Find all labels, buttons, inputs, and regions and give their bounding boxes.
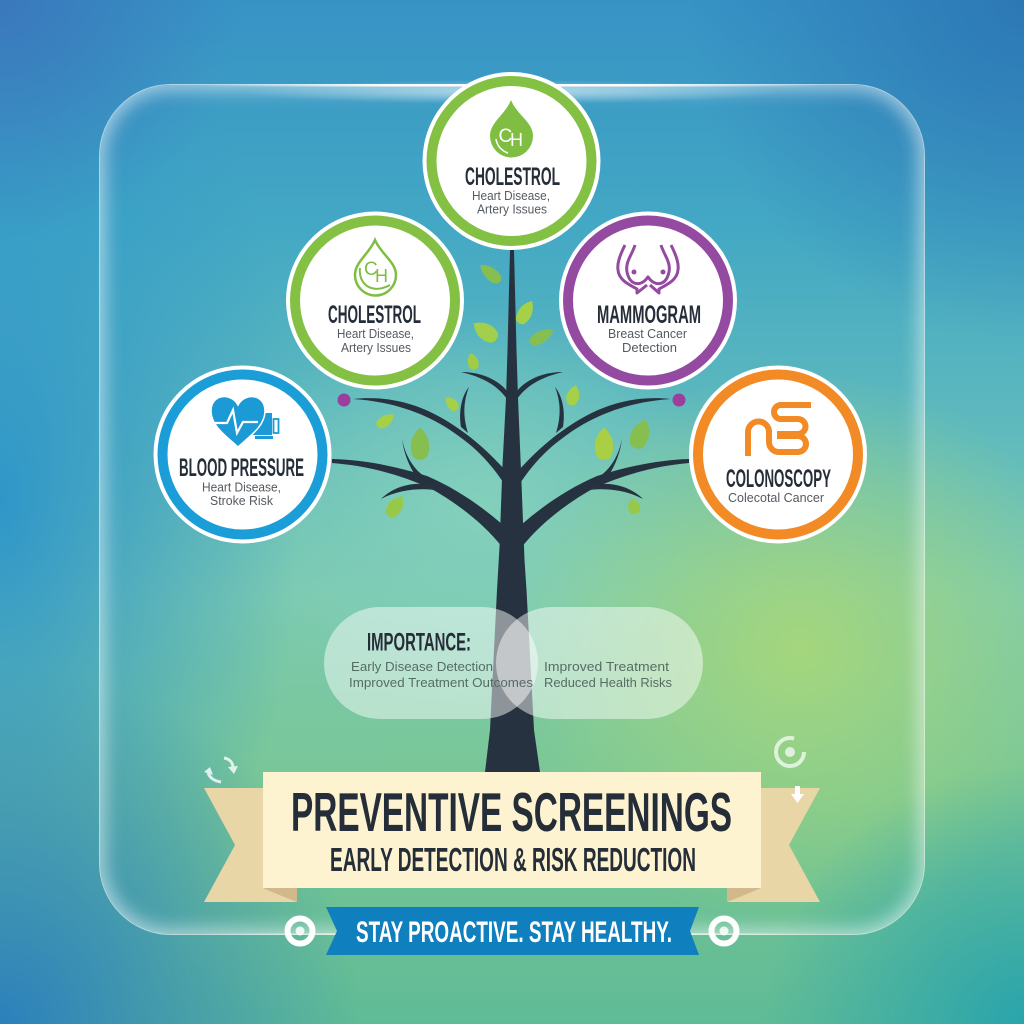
- heading: COLONOSCOPY: [726, 465, 831, 493]
- right benefits: Improved Treatment: [544, 659, 669, 674]
- circle: blood pressure: Stroke Risk: [210, 494, 274, 508]
- left benefits: [349, 659, 534, 690]
- icon: rotate arrows: [204, 758, 238, 782]
- circle: blood pressure: [154, 366, 332, 544]
- icon: outline drop: H: [375, 266, 388, 286]
- purple branch dots: [338, 394, 686, 406]
- tagline banner: [326, 907, 699, 955]
- circle: colonoscopy: [689, 366, 867, 544]
- description: Colecotal Cancer: [728, 491, 824, 505]
- ribbon main: [263, 772, 761, 888]
- right branches: [517, 372, 689, 548]
- heading: CHOLESTROL: [465, 163, 560, 191]
- description: Heart Disease,: [472, 189, 550, 203]
- description: Heart Disease,: [202, 480, 281, 494]
- right benefits: Reduced Health Risks: [544, 675, 672, 690]
- icon: heart and cuff: [211, 397, 278, 447]
- icon: right target ring: [712, 918, 736, 944]
- ribbon right tail: [727, 788, 820, 902]
- icon: filled drop: [490, 100, 533, 158]
- right pill: [496, 607, 703, 719]
- importance heading: IMPORTANCE:: [367, 628, 471, 656]
- icon: colon: [748, 405, 811, 456]
- heading: MAMMOGRAM: [597, 301, 701, 329]
- glass panel: [99, 84, 925, 935]
- icon: top right ring: [776, 738, 804, 766]
- left branches: [332, 372, 507, 548]
- panel highlights: [200, 80, 824, 935]
- description: Heart Disease,: [337, 327, 414, 341]
- left benefits: Early Disease Detection: [351, 659, 493, 674]
- heading: CHOLESTROL: [328, 301, 421, 329]
- circle: mammogram: [559, 212, 737, 390]
- circle: cholesterol top: Artery Issues: [477, 202, 547, 216]
- tree trunk: [485, 250, 540, 772]
- ribbon folds: [263, 888, 761, 902]
- icon: down arrow: [791, 786, 804, 803]
- description: Breast Cancer: [608, 327, 687, 341]
- icon: left target ring: [288, 918, 312, 944]
- left benefits: Improved Treatment Outcomes: [349, 675, 534, 690]
- main title: PREVENTIVE SCREENINGS: [291, 781, 732, 843]
- icon: filled drop: H: [510, 130, 523, 150]
- ribbon left tail: [204, 788, 297, 902]
- circle: cholesterol left: Artery Issues: [341, 341, 411, 355]
- icon: outline drop: [355, 240, 396, 296]
- title ribbon: [204, 772, 820, 902]
- circle: cholesterol left: [286, 212, 464, 390]
- importance pills: [324, 607, 703, 719]
- icon: mammogram: [618, 245, 678, 293]
- icon: outline drop: C: [364, 259, 378, 280]
- heading: BLOOD PRESSURE: [179, 454, 304, 482]
- tagline banner: STAY PROACTIVE. STAY HEALTHY.: [356, 916, 672, 949]
- circle: mammogram: Detection: [622, 341, 677, 355]
- subtitle: EARLY DETECTION & RISK REDUCTION: [330, 841, 696, 878]
- right benefits: [544, 659, 672, 690]
- icon: filled drop: C: [498, 126, 512, 147]
- tree: [332, 250, 689, 772]
- circle: cholesterol top: [422, 72, 600, 250]
- leaves: [374, 260, 654, 520]
- left pill: [324, 607, 538, 719]
